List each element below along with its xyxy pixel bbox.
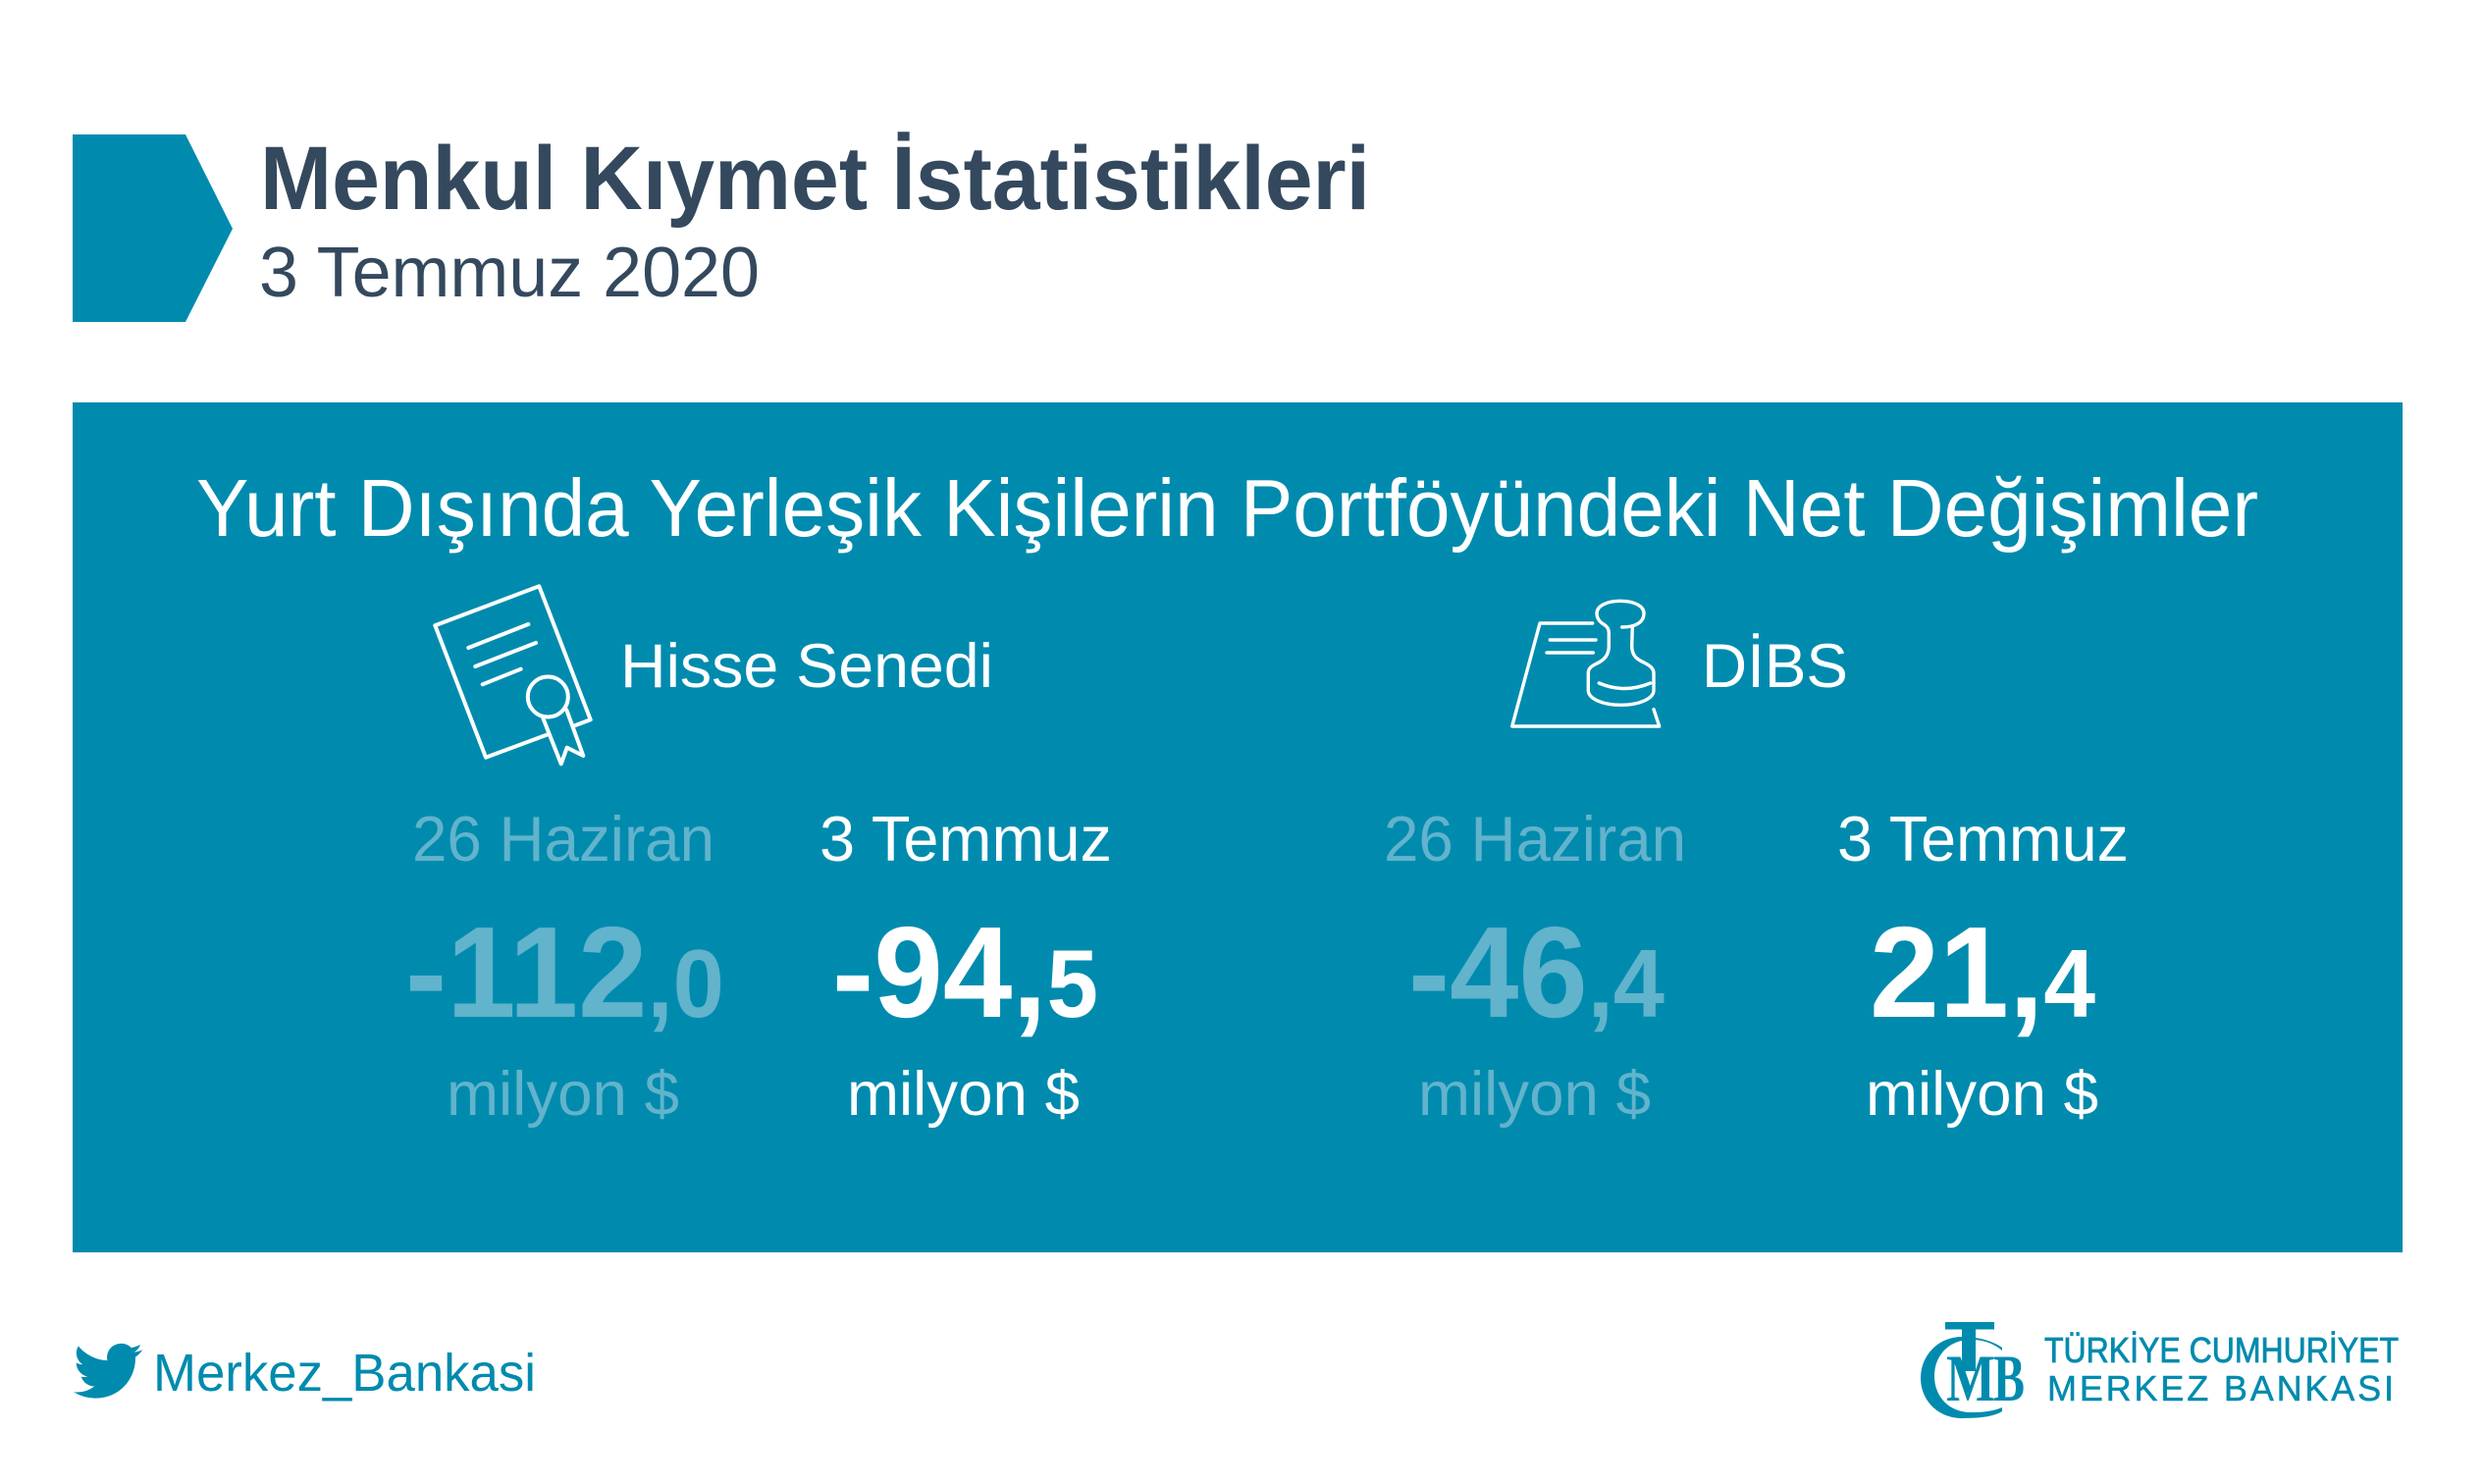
icon: share certificate (435, 586, 591, 764)
unit: milyon $ (447, 1060, 679, 1129)
unit: milyon $ (847, 1060, 1080, 1129)
date label: 26 Haziran (1384, 803, 1686, 874)
icon: stamp on paper (1512, 601, 1660, 726)
unit: milyon $ (1418, 1060, 1651, 1129)
label: DİBS: DİBS (1702, 632, 1848, 701)
twitter handle: Merkez_Bankasi (153, 1344, 536, 1403)
logo emblem: M (1946, 1341, 1995, 1415)
logo emblem (1921, 1322, 2025, 1418)
date label: 3 Temmuz (1837, 803, 2129, 874)
title: Menkul Kıymet İstatistikleri (260, 129, 1370, 229)
panel background (73, 402, 2403, 1252)
value: -112,0 (405, 900, 724, 1044)
logo line 2: MERKEZ BANKASI (2047, 1368, 2394, 1408)
value: -46,4 (1408, 900, 1665, 1044)
label: Hisse Senedi: Hisse Senedi (620, 632, 993, 701)
panel: net changes (73, 402, 2403, 1252)
column: Hisse Senedi 3 Temmuz (820, 803, 1112, 1129)
panel heading: Yurt Dışında Yerleşik Kişilerin Portföyündeki Net Değişimler (196, 462, 2258, 554)
date label: 26 Haziran (412, 803, 714, 874)
column: DİBS 3 Temmuz (1837, 803, 2129, 1129)
logo: TCMB (1921, 1322, 2399, 1418)
logo line 1: TÜRKİYE CUMHURİYET (2044, 1330, 2399, 1370)
value: -94,5 (832, 900, 1098, 1044)
column: Hisse Senedi 26 Haziran (405, 803, 724, 1129)
date subtitle: 3 Temmuz 2020 (259, 234, 760, 312)
column: DİBS 26 Haziran (1384, 803, 1686, 1129)
icon: twitter bird (74, 1344, 142, 1399)
value: 21,4 (1870, 900, 2095, 1044)
header arrow (73, 134, 233, 322)
logo emblem: B (1993, 1341, 2025, 1415)
date label: 3 Temmuz (820, 803, 1112, 874)
unit: milyon $ (1866, 1060, 2098, 1129)
